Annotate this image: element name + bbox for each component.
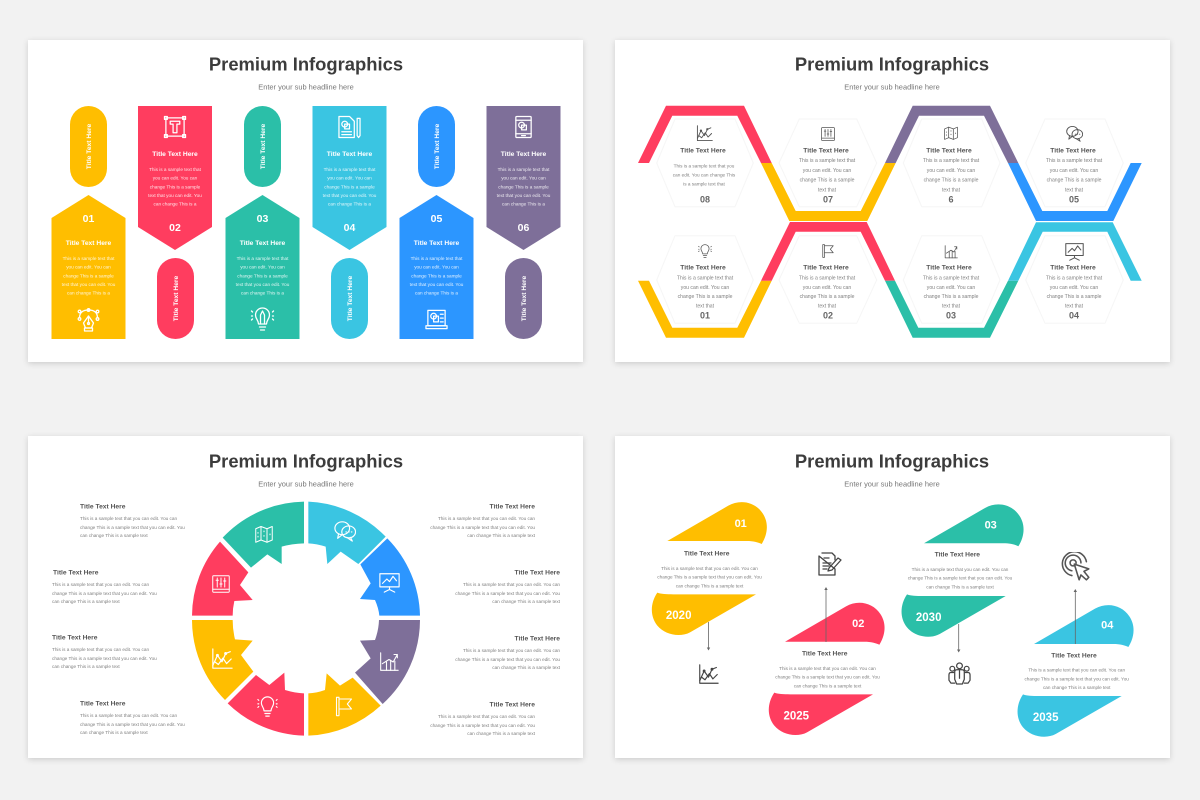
icon: bulb xyxy=(699,245,711,257)
card title 04: Title Text Here xyxy=(327,151,373,158)
title 01: Title Text Here xyxy=(680,265,726,272)
title 07: Title Text Here xyxy=(803,147,849,154)
pill 04 xyxy=(331,258,368,339)
number 01: 01 xyxy=(83,213,94,225)
right label 4: change This is a sample text that you can edit. You xyxy=(430,723,535,728)
text 6: change This is a sample xyxy=(924,178,979,184)
icon: map xyxy=(945,127,957,139)
card text 02: change This is a sample xyxy=(150,184,201,189)
card text 03: can change This is a xyxy=(241,291,284,296)
top blob 03 xyxy=(924,504,1024,546)
right label 4: Title Text Here xyxy=(490,702,535,708)
left label 3: Title Text Here xyxy=(52,634,98,642)
left label 1: change This is a sample text that you can edit. You xyxy=(80,525,185,530)
bottom blob 2030 xyxy=(902,594,1006,637)
card text 05: you can edit. You can xyxy=(414,265,459,270)
subheading: Enter your sub headline here xyxy=(844,480,940,488)
hexagon 01 xyxy=(657,236,753,323)
arrow up xyxy=(1074,589,1077,644)
year 2030: 2030 xyxy=(916,612,941,624)
number 06: 06 xyxy=(518,222,529,234)
left label 2: This is a sample text that you can edit. You can xyxy=(52,582,149,587)
left label 4: This is a sample text that you can edit. You can xyxy=(80,713,177,718)
heading: Premium Infographics xyxy=(209,450,403,472)
number 04: 04 xyxy=(1101,620,1114,632)
card text 01: change This is a sample xyxy=(63,273,114,278)
number 07: 07 xyxy=(823,194,833,204)
right label 4: This is a sample text that you can edit. You can xyxy=(438,714,535,719)
number 08: 08 xyxy=(700,194,710,204)
card 02 xyxy=(138,106,212,339)
icon: pen tool xyxy=(78,309,99,331)
timeline step 2030 xyxy=(902,504,1024,684)
panel: timeline xyxy=(615,436,1170,758)
text 02: This is a sample text that xyxy=(799,275,856,281)
card title 03: Title Text Here xyxy=(240,240,286,247)
title step 02: Title Text Here xyxy=(802,651,848,658)
bottom blob 2035 xyxy=(1018,694,1122,737)
left label 1: This is a sample text that you can edit. You can xyxy=(80,516,177,521)
icon: bar growth xyxy=(945,246,957,258)
number 01: 01 xyxy=(700,311,710,321)
text 01: you can edit. You can xyxy=(681,285,729,291)
icon: chat bubbles xyxy=(1067,126,1083,141)
right label 2: change This is a sample text that you can edit. You xyxy=(455,591,560,596)
subheading: Enter your sub headline here xyxy=(844,82,940,92)
hexagon outline bands xyxy=(638,106,1142,338)
text 04: you can edit. You can xyxy=(1050,285,1098,291)
right label 1: Title Text Here xyxy=(490,504,535,510)
hexagon 04 xyxy=(1026,236,1123,323)
title 6: Title Text Here xyxy=(926,147,972,154)
pill 02: Title Text Here xyxy=(173,275,180,321)
card text 06: can change This is a xyxy=(502,202,545,207)
text 01: This is a sample text that xyxy=(677,275,734,281)
number 03: 03 xyxy=(257,213,268,225)
text 07: change This is a sample xyxy=(800,178,855,184)
right label 2 xyxy=(455,570,561,604)
timeline step 2020 xyxy=(652,502,767,683)
pill 03 xyxy=(244,106,281,187)
title step 04: Title Text Here xyxy=(1051,653,1097,660)
left label 3: This is a sample text that you can edit. You can xyxy=(52,647,149,652)
text 03: change This is a sample xyxy=(924,294,979,300)
right label 3: can change This is a sample text xyxy=(492,665,561,670)
heading: Premium Infographics xyxy=(795,450,989,472)
text step 04: change This is a sample text that you can edit. You xyxy=(1024,676,1129,681)
text step 01: can change This is a sample text xyxy=(676,583,744,588)
pill 01 xyxy=(70,106,107,187)
card title 02: Title Text Here xyxy=(152,151,198,158)
icon: team xyxy=(949,663,970,684)
panel background xyxy=(615,436,1170,758)
pill 01: Title Text Here xyxy=(86,123,93,169)
number 02: 02 xyxy=(823,311,833,321)
text 07: you can edit. You can xyxy=(803,168,851,174)
title step 01: Title Text Here xyxy=(684,551,730,558)
card text 06: you can edit. You can xyxy=(501,176,546,181)
right label 1 xyxy=(430,504,536,538)
title step 03: Title Text Here xyxy=(935,552,980,559)
icon: sliders xyxy=(822,128,834,140)
text 02: you can edit. You can xyxy=(803,285,851,291)
arrow down xyxy=(707,622,710,650)
left label 2: can change This is a sample text xyxy=(52,599,120,604)
card title 01: Title Text Here xyxy=(66,240,112,247)
right label 4: can change This is a sample text xyxy=(467,731,536,736)
text step 01: This is a sample text that you can edit. You can xyxy=(661,566,758,571)
top blob 04 xyxy=(1034,605,1134,647)
timeline step 2025 xyxy=(769,553,885,735)
panel: hexagon chain xyxy=(615,40,1170,362)
card 01 xyxy=(52,106,126,339)
timeline step 2035 xyxy=(1018,552,1134,737)
icon: phone xyxy=(516,116,531,138)
pill 03: Title Text Here xyxy=(260,123,267,169)
number 05: 05 xyxy=(1069,194,1079,204)
panel background xyxy=(28,40,583,362)
text 03: you can edit. You can xyxy=(927,285,975,291)
right label 1: change This is a sample text that you can edit. You xyxy=(430,525,535,530)
hexagon 08 xyxy=(657,119,753,207)
text 07: text that xyxy=(818,187,837,193)
card text 02: can change This is a xyxy=(154,202,197,207)
text step 03: can change This is a sample text xyxy=(926,584,994,589)
left label 3 xyxy=(52,634,157,669)
text 08: is a sample text that xyxy=(683,181,726,186)
left label 3: can change This is a sample text xyxy=(52,664,120,669)
text 01: change This is a sample xyxy=(678,294,733,300)
card text 01: can change This is a xyxy=(67,291,110,296)
ring icons xyxy=(213,522,399,716)
left label 2: Title Text Here xyxy=(53,570,99,576)
subheading: Enter your sub headline here xyxy=(258,480,354,488)
card text 01: you can edit. You can xyxy=(66,265,111,270)
number 02: 02 xyxy=(852,618,864,630)
card text 06: change This is a sample xyxy=(498,184,549,189)
text step 02: This is a sample text that you can edit. You can xyxy=(779,666,876,671)
card text 06: text that you can edit. You xyxy=(497,193,551,198)
card 04 xyxy=(312,106,386,339)
number 05: 05 xyxy=(431,213,442,225)
card text 05: This is a sample text that xyxy=(411,256,463,261)
arrow down xyxy=(957,624,960,652)
panel: pill and arrow cards xyxy=(28,40,583,362)
text 05: you can edit. You can xyxy=(1050,168,1098,174)
text 01: text that xyxy=(696,304,715,310)
text 6: This is a sample text that xyxy=(923,158,980,164)
text step 04: can change This is a sample text xyxy=(1043,685,1111,690)
icon: presentation board xyxy=(1066,244,1083,260)
panel: segmented ring xyxy=(28,436,583,758)
text step 03: change This is a sample text that you can edit. You xyxy=(908,576,1013,581)
year 2025: 2025 xyxy=(784,710,810,722)
right label 2: This is a sample text that you can edit. You can xyxy=(463,582,560,587)
right label 3: Title Text Here xyxy=(515,636,560,642)
icon: document xyxy=(339,116,360,138)
top blob 01 xyxy=(667,502,767,544)
left label 2: change This is a sample text that you can edit. You xyxy=(52,591,157,596)
number 04: 04 xyxy=(344,222,355,234)
text 04: text that xyxy=(1065,304,1084,310)
text 03: This is a sample text that xyxy=(923,275,980,281)
bottom blob 2020 xyxy=(652,593,756,635)
pill 06: Title Text Here xyxy=(521,275,528,321)
card text 04: can change This is a xyxy=(328,202,371,207)
house card 01 xyxy=(52,195,126,339)
arrow card 02 xyxy=(138,106,212,250)
text 04: This is a sample text that xyxy=(1046,275,1103,281)
right label 4 xyxy=(430,702,536,736)
house card 03 xyxy=(226,195,300,339)
text 04: change This is a sample xyxy=(1047,294,1102,300)
hexagon 07 xyxy=(779,119,877,207)
bottom blob 2025 xyxy=(769,693,873,735)
card 06 xyxy=(486,106,560,339)
text 05: This is a sample text that xyxy=(1046,158,1103,164)
text step 02: change This is a sample text that you can edit. You xyxy=(775,675,880,680)
icon: text frame xyxy=(164,116,186,138)
icon: line chart xyxy=(697,126,712,141)
icon: target xyxy=(1062,552,1089,580)
text 07: This is a sample text that xyxy=(799,158,856,164)
card 05 xyxy=(400,106,474,339)
card text 04: This is a sample text that xyxy=(324,167,376,172)
card text 03: you can edit. You can xyxy=(240,265,285,270)
card text 05: change This is a sample xyxy=(411,273,462,278)
text 6: you can edit. You can xyxy=(927,168,975,174)
hexagon 6 xyxy=(903,119,1000,207)
title 03: Title Text Here xyxy=(926,265,972,272)
year 2020: 2020 xyxy=(666,610,691,622)
text 03: text that xyxy=(942,304,961,310)
card 03 xyxy=(226,106,300,339)
card text 06: This is a sample text that xyxy=(498,167,550,172)
arrow up xyxy=(824,587,828,642)
text 08: can edit. You can change This xyxy=(673,172,736,178)
subheading: Enter your sub headline here xyxy=(258,82,354,92)
text 08: This is a sample text that you xyxy=(674,164,735,169)
title 05: Title Text Here xyxy=(1050,147,1096,154)
left label 2 xyxy=(52,570,157,604)
title 08: Title Text Here xyxy=(680,147,726,154)
left label 4: can change This is a sample text xyxy=(80,730,148,735)
text 05: text that xyxy=(1065,187,1084,193)
icon: flag xyxy=(823,245,833,257)
card text 02: text that you can edit. You xyxy=(148,193,202,198)
right label 2: can change This is a sample text xyxy=(492,599,561,604)
left label 4: Title Text Here xyxy=(80,700,126,708)
text 05: change This is a sample xyxy=(1047,178,1102,184)
title 02: Title Text Here xyxy=(803,265,849,272)
pill 06 xyxy=(505,258,542,339)
pill 02 xyxy=(157,258,194,339)
card text 03: This is a sample text that xyxy=(237,256,289,261)
card text 03: change This is a sample xyxy=(237,273,288,278)
number 02: 02 xyxy=(169,222,181,234)
right label 3: This is a sample text that you can edit. You can xyxy=(463,648,560,653)
card text 04: text that you can edit. You xyxy=(323,193,377,198)
card text 03: text that you can edit. You xyxy=(236,282,290,287)
year 2035: 2035 xyxy=(1033,712,1059,724)
number 01: 01 xyxy=(735,518,747,530)
right label 2: Title Text Here xyxy=(515,570,560,576)
heading: Premium Infographics xyxy=(209,54,403,74)
left label 3: change This is a sample text that you can edit. You xyxy=(52,656,157,661)
left label 4 xyxy=(80,700,185,735)
hexagon 03 xyxy=(903,236,1000,323)
card title 05: Title Text Here xyxy=(414,240,460,247)
icon: laptop xyxy=(426,310,447,329)
panel background xyxy=(28,436,583,758)
text 02: text that xyxy=(818,304,837,310)
heading: Premium Infographics xyxy=(795,54,989,74)
number 6: 6 xyxy=(948,194,954,204)
arrow card 04 xyxy=(312,106,386,250)
right label 1: This is a sample text that you can edit. You can xyxy=(438,516,535,521)
icon: signed note xyxy=(819,553,841,575)
pill 05: Title Text Here xyxy=(434,123,441,169)
card text 01: text that you can edit. You xyxy=(62,282,116,287)
number 03: 03 xyxy=(985,520,997,532)
left label 4: change This is a sample text that you can edit. You xyxy=(80,722,185,727)
card text 04: change This is a sample xyxy=(324,184,375,189)
number 03: 03 xyxy=(946,311,956,321)
top blob 02 xyxy=(785,603,885,645)
card text 01: This is a sample text that xyxy=(63,256,115,261)
text step 03: This is a sample text that you can edit. You can xyxy=(912,567,1009,572)
text 02: change This is a sample xyxy=(800,294,855,300)
house card 05 xyxy=(400,195,474,339)
text step 02: can change This is a sample text xyxy=(794,683,862,688)
card title 06: Title Text Here xyxy=(501,151,547,158)
card text 05: text that you can edit. You xyxy=(410,282,464,287)
hexagon 05 xyxy=(1026,119,1123,207)
card text 04: you can edit. You can xyxy=(327,176,372,181)
card text 05: can change This is a xyxy=(415,291,458,296)
right label 3 xyxy=(455,636,561,670)
text step 01: change This is a sample text that you can edit. You xyxy=(657,575,762,580)
pill 04: Title Text Here xyxy=(347,275,354,321)
pill 05 xyxy=(418,106,455,187)
title 04: Title Text Here xyxy=(1050,265,1096,272)
card text 02: This is a sample text that xyxy=(149,167,202,172)
text 6: text that xyxy=(942,187,961,193)
arrow card 06 xyxy=(486,106,560,250)
hexagon 02 xyxy=(779,236,877,323)
ring chart segments xyxy=(192,502,420,736)
right label 3: change This is a sample text that you can edit. You xyxy=(455,657,560,662)
number 04: 04 xyxy=(1069,311,1079,321)
left label 1 xyxy=(80,504,185,538)
icon: idea bulb xyxy=(252,308,274,330)
panel background xyxy=(615,40,1170,362)
left label 1: can change This is a sample text xyxy=(80,533,148,538)
card text 02: you can edit. You can xyxy=(153,176,198,181)
icon: line chart xyxy=(700,665,718,683)
text step 04: This is a sample text that you can edit. You can xyxy=(1028,668,1125,672)
right label 1: can change This is a sample text xyxy=(467,533,536,538)
left label 1: Title Text Here xyxy=(80,504,126,510)
